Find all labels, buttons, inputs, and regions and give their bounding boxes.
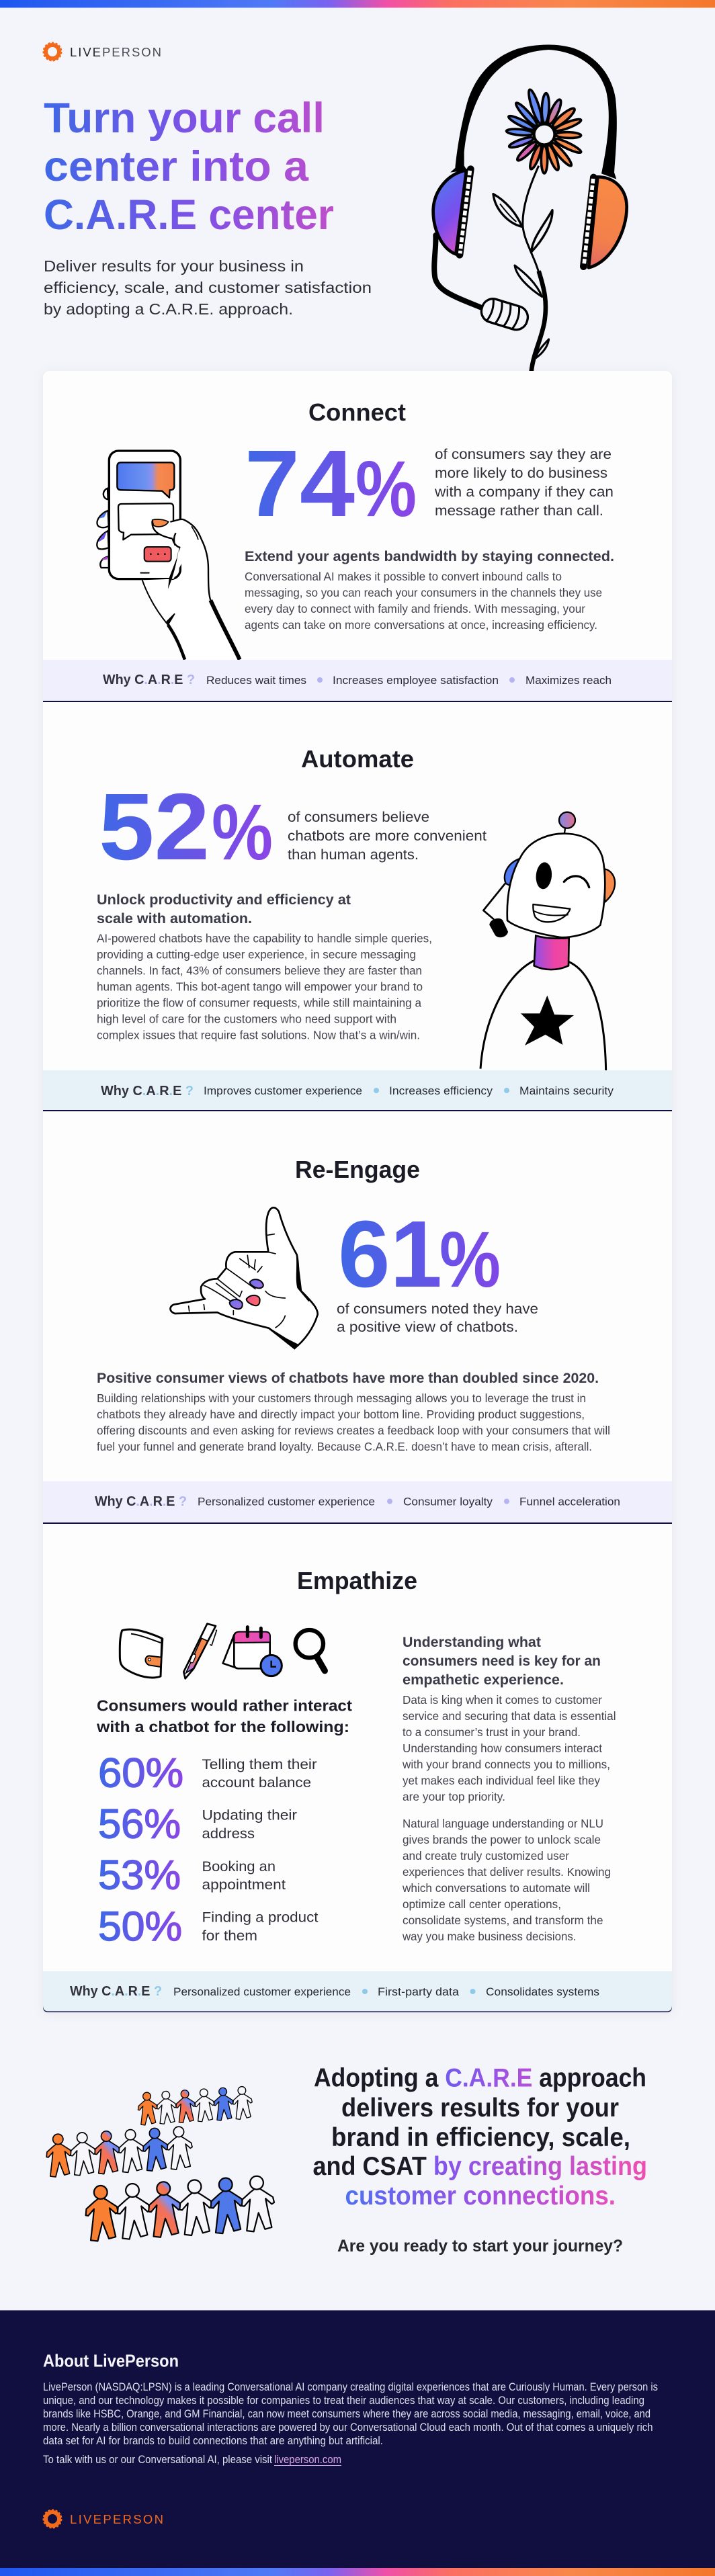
- stat: 60%: 60%: [98, 1750, 183, 1795]
- illustration: shaka hand: [171, 1207, 318, 1348]
- right body text: service and securing that data is essential: [403, 1709, 616, 1723]
- body text: chatbots they already have and directly impact your bottom line. Providing product suggestions,: [97, 1408, 585, 1421]
- stat: 61%: [338, 1201, 501, 1307]
- about text: data set for AI for brands to build connections that are anything but artificial.: [43, 2435, 383, 2447]
- icon: wallet: [120, 1629, 163, 1678]
- cta message: Adopting a C.A.R.E approach: [314, 2064, 646, 2092]
- stat description: chatbots are more convenient: [288, 828, 487, 844]
- stat description: of consumers noted they have: [337, 1301, 538, 1317]
- panel: empathize: [43, 1567, 672, 2012]
- right body text: [402, 1693, 616, 1943]
- why care band: Why C.A.R.E ?: [95, 1494, 187, 1509]
- right subheading: empathetic experience.: [403, 1672, 564, 1688]
- stat: 52%: %: [212, 788, 273, 877]
- right body text: are your top priority.: [403, 1790, 505, 1803]
- cta message: brand in efficiency, scale,: [331, 2123, 630, 2152]
- left heading: [96, 1697, 352, 1735]
- cta message: [313, 2064, 647, 2210]
- stat: 60%: Telling them their: [202, 1757, 317, 1772]
- why care band: [43, 1070, 672, 1111]
- heading: automate: Automate: [301, 745, 414, 773]
- body text: [97, 1391, 610, 1453]
- cta message: delivers results for your: [341, 2094, 619, 2122]
- illustration: winking robot: [480, 812, 615, 1070]
- heading: re-engage: Re-Engage: [295, 1156, 420, 1183]
- stat description: of consumers believe: [288, 810, 429, 825]
- header: [44, 43, 627, 372]
- why care band: Consolidates systems: [486, 1986, 599, 1998]
- right body text: gives brands the power to unlock scale: [403, 1833, 601, 1846]
- stat: 56%: Updating their: [202, 1807, 297, 1823]
- about text: LivePerson (NASDAQ:LPSN) is a leading Conversational AI company creating digital experiences that are Curiously Human. Every person is: [43, 2381, 658, 2393]
- stat: 74%: [245, 430, 417, 536]
- body text: high level of care for the customers who need support with: [97, 1012, 396, 1025]
- right body text: which conversations to automate will: [402, 1881, 590, 1895]
- footer logo: LIVEPERSON: [70, 2512, 163, 2526]
- call to action: [45, 2064, 647, 2256]
- body text: providing a cutting-edge user experience, in secure messaging: [97, 947, 416, 961]
- stat: 50%: for them: [202, 1928, 257, 1944]
- stat: 53%: Booking an: [202, 1859, 276, 1875]
- panel: connect: [43, 398, 672, 702]
- footer heading: About LivePerson: [43, 2350, 179, 2370]
- subheading: Positive consumer views of chatbots have more than doubled since 2020.: [97, 1370, 599, 1386]
- stat description: with a company if they can: [434, 484, 614, 500]
- stat: 61%: %: [439, 1215, 501, 1304]
- body text: AI-powered chatbots have the capability to handle simple queries,: [97, 931, 432, 945]
- body text: offering discounts and even asking for reviews creates a feedback loop with your consumers that will: [97, 1424, 610, 1437]
- subheading: scale with automation.: [97, 910, 252, 927]
- why care band: Why C.A.R.E ?: [101, 1084, 194, 1099]
- logo: [44, 43, 161, 60]
- right subheading: consumers need is key for an: [403, 1653, 601, 1669]
- stat description: [434, 447, 614, 519]
- body text: Building relationships with your customers through messaging allows you to leverage the trust in: [97, 1391, 586, 1405]
- cta message: customer connections.: [345, 2182, 616, 2210]
- stat: 52%: 52: [99, 773, 210, 879]
- stat: 52%: [99, 773, 273, 879]
- heading: empathize: Empathize: [297, 1567, 417, 1594]
- why care band: Reduces wait times: [206, 675, 306, 687]
- bottom gradient bar: [0, 2568, 715, 2576]
- about text: To talk with us or our Conversational AI, please visit: [43, 2454, 272, 2466]
- stat: 56%: 56%: [98, 1801, 181, 1846]
- right body text: experiences that deliver results. Knowing: [403, 1865, 611, 1879]
- why care band: Why C.A.R.E ?: [103, 673, 195, 687]
- right body text: way you make business decisions.: [402, 1930, 577, 1943]
- panel: card background: [43, 371, 672, 2012]
- link: liveperson.com: [274, 2454, 341, 2466]
- right body text: optimize call center operations,: [403, 1897, 561, 1911]
- stat description: [288, 810, 487, 863]
- right subheading: Understanding what: [403, 1634, 541, 1650]
- stat description: than human agents.: [288, 847, 419, 863]
- stat description: of consumers say they are: [435, 447, 612, 462]
- right body text: Natural language understanding or NLU: [403, 1817, 603, 1830]
- why care band: First-party data: [378, 1986, 460, 1998]
- stat: 53%: appointment: [202, 1877, 286, 1893]
- footer: [0, 2310, 715, 2576]
- right body text: with your brand connects you to millions,: [402, 1758, 610, 1771]
- stat: 50%: 50%: [98, 1903, 182, 1949]
- subheading: [97, 892, 351, 927]
- stat: 60%: account balance: [202, 1775, 311, 1791]
- stat: 74%: 74: [245, 430, 355, 536]
- right body text: to a consumer’s trust in your brand.: [403, 1725, 581, 1739]
- about text: unique, and our technology makes it possible for companies to treat their audiences that way at scale. Our customers, including leading: [43, 2395, 644, 2407]
- about text: brands like HSBC, Orange, and GM Financial, can now meet consumers where they are across social media, messaging, email, voice, and: [43, 2408, 650, 2420]
- why care band: Increases efficiency: [389, 1085, 493, 1097]
- icon: pen: [183, 1624, 216, 1678]
- why care band: Maintains security: [519, 1085, 614, 1097]
- subtitle: [44, 257, 372, 318]
- stat: 61%: 61: [338, 1201, 442, 1307]
- body text: [97, 931, 432, 1041]
- stat: 56%: address: [202, 1826, 255, 1842]
- why care band: Funnel acceleration: [519, 1496, 620, 1508]
- about text: more. Nearly a billion conversational interactions are powered by our Conversational Cloud each month. Out of that comes a uniquely rich: [43, 2421, 653, 2434]
- illustration: headset and flower: [433, 44, 627, 372]
- title: C.A.R.E center: [44, 191, 334, 239]
- subtitle: Deliver results for your business in: [44, 257, 304, 275]
- why care band: Increases employee satisfaction: [333, 675, 499, 687]
- why care band: Consumer loyalty: [403, 1496, 493, 1508]
- icon: magnifier: [296, 1630, 325, 1671]
- left heading: Consumers would rather interact: [97, 1697, 352, 1715]
- body text: Conversational AI makes it possible to convert inbound calls to: [245, 570, 562, 583]
- stat list: [98, 1750, 319, 1949]
- why care band: Personalized customer experience: [173, 1986, 351, 1998]
- stat description: [337, 1301, 538, 1335]
- why care band: [43, 1971, 672, 2012]
- body text: agents can take on more conversations at once, increasing efficiency.: [245, 618, 597, 632]
- right body text: and create truly customized user: [403, 1849, 569, 1862]
- why care band: Improves customer experience: [204, 1085, 362, 1097]
- why care band: [43, 1481, 672, 1524]
- icon: calendar: [223, 1627, 282, 1676]
- stat: 50%: [98, 1903, 319, 1949]
- top gradient bar: [0, 0, 715, 8]
- why care band: [43, 660, 672, 702]
- panel: automate: [43, 745, 672, 1111]
- body text: human agents. This bot-agent tango will empower your brand to: [97, 980, 423, 993]
- why care band: Maximizes reach: [525, 675, 612, 687]
- right body text: Understanding how consumers interact: [403, 1742, 602, 1755]
- body text: complex issues that require fast solutions. Now that’s a win/win.: [97, 1028, 420, 1041]
- body text: messaging, so you can reach your consumers in the channels they use: [245, 586, 602, 599]
- right body text: yet makes each individual feel like they: [403, 1774, 600, 1787]
- illustration: paper-chain people: [45, 2086, 276, 2241]
- stat: 53%: [98, 1852, 286, 1897]
- why care band: Personalized customer experience: [198, 1496, 375, 1508]
- stat: 53%: 53%: [98, 1852, 181, 1897]
- stat: 74%: %: [355, 445, 417, 533]
- right subheading: [403, 1634, 601, 1688]
- icons: wallet, pen, calendar, magnifier: [120, 1624, 325, 1678]
- right body text: Data is king when it comes to customer: [403, 1693, 602, 1707]
- body text: [245, 570, 602, 632]
- stat: 50%: Finding a product: [202, 1909, 319, 1926]
- subheading: Unlock productivity and efficiency at: [97, 892, 351, 908]
- why care band: Why C.A.R.E ?: [70, 1984, 162, 1999]
- stat description: message rather than call.: [435, 503, 603, 519]
- heading: connect: Connect: [308, 398, 406, 426]
- title: [44, 95, 334, 239]
- logo: LIVEPERSON: [70, 45, 161, 59]
- panel: re-engage: [43, 1156, 672, 1524]
- stat: 56%: [98, 1801, 297, 1846]
- stat: 60%: [98, 1750, 317, 1795]
- stat description: more likely to do business: [435, 466, 607, 481]
- left heading: with a chatbot for the following:: [96, 1718, 349, 1735]
- body text: every day to connect with family and friends. With messaging, your: [245, 602, 585, 615]
- body text: prioritize the flow of consumer requests, while still maintaining a: [97, 996, 421, 1009]
- cta message: and CSAT by creating lasting: [313, 2152, 647, 2181]
- footer logo: [44, 2510, 163, 2528]
- title: Turn your call: [44, 95, 325, 142]
- right body text: consolidate systems, and transform the: [403, 1914, 603, 1927]
- subtitle: efficiency, scale, and customer satisfaction: [44, 279, 372, 296]
- subheading: Extend your agents bandwidth by staying connected.: [245, 548, 614, 564]
- body text: channels. In fact, 43% of consumers believe they are faster than: [97, 963, 422, 977]
- illustration: hand holding phone: [97, 451, 241, 660]
- body text: fuel your funnel and generate brand loyalty. Because C.A.R.E. doesn’t have to mean crisis, afterall.: [97, 1440, 592, 1453]
- cta question: Are you ready to start your journey?: [337, 2237, 623, 2256]
- subtitle: by adopting a C.A.R.E. approach.: [44, 300, 293, 318]
- stat description: a positive view of chatbots.: [337, 1320, 518, 1335]
- title: center into a: [44, 143, 309, 190]
- about text: [43, 2381, 658, 2466]
